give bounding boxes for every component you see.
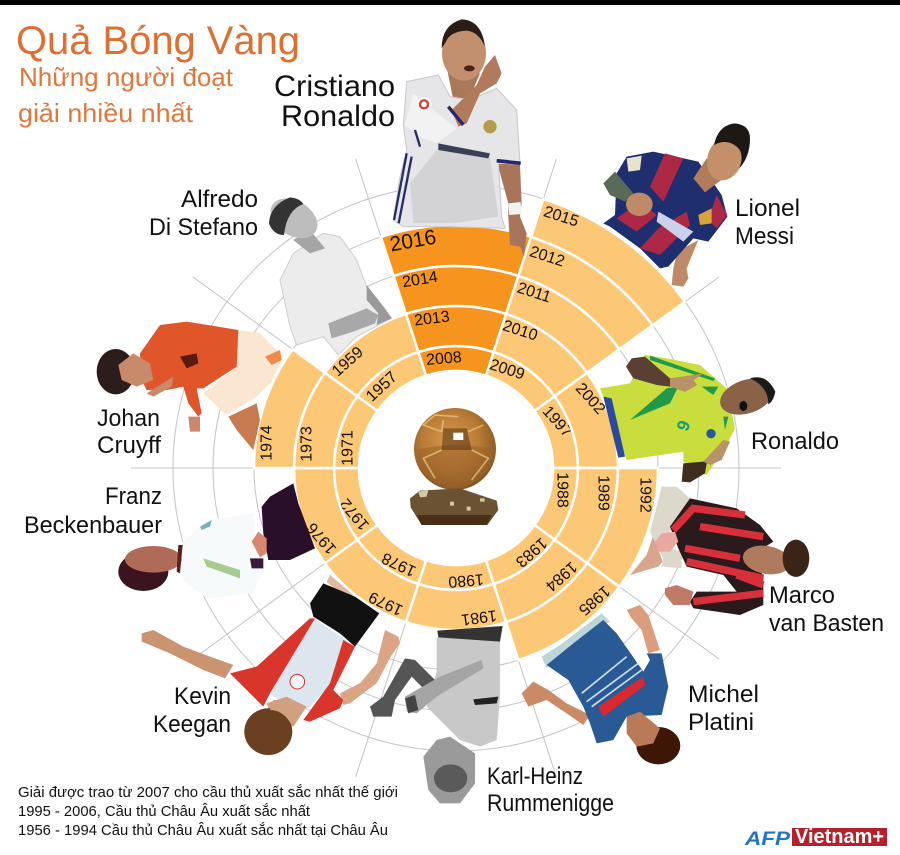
cell: 2013 <box>406 306 506 352</box>
sector: van Basten years <box>534 468 658 587</box>
name: Kevin Keegan <box>153 683 231 738</box>
cell: 1985: 1985 <box>575 582 613 618</box>
name: Lionel Messi: Messi <box>735 223 794 250</box>
cell: 2014 <box>394 266 518 314</box>
name: Marco van Basten <box>769 582 884 637</box>
footnote: Giải được trao từ 2007 cho cầu thủ xuất sắc nhất thế giới <box>18 784 398 801</box>
sector: Di Stefano years <box>325 314 426 411</box>
name: Ronaldo: Ronaldo <box>751 428 839 455</box>
cell: 2010: 2010 <box>500 317 540 345</box>
player: Lionel Messi <box>603 123 750 287</box>
cell: 1980: 1980 <box>447 570 484 590</box>
logo: AFP Vietnam+ <box>744 826 887 850</box>
sector: Rummenigge years <box>406 560 506 630</box>
name: Cristiano Ronaldo: Ronaldo <box>281 100 395 133</box>
name: Karl-Heinz Rummenigge <box>487 763 614 817</box>
icon: golden ball trophy <box>410 408 498 525</box>
player: Marco van Basten <box>630 487 809 615</box>
cell: 1992: 1992 <box>636 477 654 513</box>
cell: 1988: 1988 <box>554 472 570 508</box>
cell: 2012 <box>518 237 653 349</box>
sector: Cristiano Ronaldo years <box>381 225 531 376</box>
title: Quả Bóng Vàng <box>16 19 300 63</box>
cell: 1959: 1959 <box>329 344 367 380</box>
footnote <box>18 784 398 839</box>
footnote: 1956 - 1994 Cầu thủ Châu Âu xuất sắc nhất tại Châu Âu <box>18 822 388 839</box>
cell: 2009: 2009 <box>487 356 527 384</box>
cell: 1978: 1978 <box>379 549 419 579</box>
player: Alfredo Di Stefano <box>263 190 392 355</box>
sector: Keegan years <box>325 525 426 622</box>
name: Alfredo Di Stefano: Di Stefano <box>149 214 258 241</box>
player: Franz Beckenbauer <box>118 483 315 598</box>
cell: 2009 <box>486 352 555 411</box>
player: Michel Platini <box>522 605 680 764</box>
sector: Platini years <box>486 525 619 660</box>
sector: Ronaldo years <box>534 373 618 468</box>
name: Alfredo Di Stefano: Alfredo <box>181 186 258 213</box>
cell: 2015: 2015 <box>541 203 581 231</box>
cell: 2011: 2011 <box>515 280 553 306</box>
player: Karl-Heinz Rummenigge <box>370 626 503 803</box>
name: Franz Beckenbauer: Beckenbauer <box>24 512 162 539</box>
player: Johan Cruyff <box>97 322 283 450</box>
cell: 1973: 1973 <box>298 426 316 462</box>
player: Kevin Keegan <box>142 575 400 755</box>
name: Karl-Heinz Rummenigge: Rummenigge <box>487 790 614 817</box>
sector: Cruyff years <box>254 349 378 468</box>
name: Franz Beckenbauer: Franz <box>105 483 162 510</box>
name: Marco van Basten: Marco <box>769 582 835 609</box>
cell: 2008: 2008 <box>426 349 463 369</box>
cell: 1974: 1974 <box>258 425 276 461</box>
cell: 2016 <box>381 225 531 276</box>
name: Lionel Messi: Lionel <box>735 195 800 222</box>
cell: 2016: 2016 <box>388 226 438 256</box>
cell: 2008 <box>418 346 494 376</box>
subtitle: giải nhiều nhất <box>18 98 194 128</box>
name: Franz Beckenbauer <box>24 483 162 539</box>
cell: 2010 <box>494 314 587 396</box>
name: Johan Cruyff <box>97 405 161 459</box>
name: Kevin Keegan: Kevin <box>174 683 231 710</box>
cell: 2014: 2014 <box>401 269 439 291</box>
logo: AFP Vietnam+: AFP <box>744 829 790 850</box>
name: Kevin Keegan: Keegan <box>153 711 231 738</box>
subtitle: Những người đoạt <box>19 62 234 92</box>
name: Marco van Basten: van Basten <box>769 610 884 637</box>
inner white disc <box>359 371 553 565</box>
top black bar <box>0 0 900 5</box>
cell: 1997: 1997 <box>539 403 575 441</box>
name: Michel Platini: Platini <box>688 709 754 736</box>
cell: 1971: 1971 <box>340 430 356 466</box>
cell: 1984: 1984 <box>542 558 580 594</box>
name: Cristiano Ronaldo: Cristiano <box>274 70 395 103</box>
cell: 2011 <box>506 276 619 373</box>
cell: 2015 <box>531 199 685 325</box>
sector: Lionel Messi years <box>486 199 685 411</box>
name: Johan Cruyff: Cruyff <box>97 432 161 459</box>
name: Cristiano Ronaldo <box>274 70 395 133</box>
cell: 1983: 1983 <box>512 534 550 570</box>
sector: Beckenbauer years <box>294 468 378 563</box>
logo: AFP Vietnam+: Vietnam+ <box>795 826 884 848</box>
player: Cristiano Ronaldo <box>393 19 527 257</box>
name: Alfredo Di Stefano <box>149 186 258 241</box>
subtitle <box>18 62 234 128</box>
cell: 1979: 1979 <box>366 588 406 618</box>
cell: 1976: 1976 <box>304 519 340 557</box>
cell: 1989: 1989 <box>594 475 612 511</box>
cell: 1957: 1957 <box>363 369 401 405</box>
cell: 2002: 2002 <box>572 380 608 418</box>
cell: 1981: 1981 <box>460 606 498 628</box>
name: Lionel Messi <box>735 195 800 250</box>
name: Johan Cruyff: Johan <box>97 405 160 432</box>
player: Ronaldo: 9 <box>672 418 694 434</box>
name: Michel Platini: Michel <box>688 681 759 708</box>
name: Karl-Heinz Rummenigge: Karl-Heinz <box>487 763 583 790</box>
background polar grid <box>131 159 781 777</box>
player: Ronaldo <box>600 355 778 482</box>
footnote: 1995 - 2006, Cầu thủ Châu Âu xuất sắc nhất <box>18 803 311 820</box>
cell: 2012: 2012 <box>527 243 567 271</box>
cell: 1972: 1972 <box>337 495 373 533</box>
cell: 2013: 2013 <box>413 308 451 330</box>
name: Michel Platini <box>688 681 759 736</box>
